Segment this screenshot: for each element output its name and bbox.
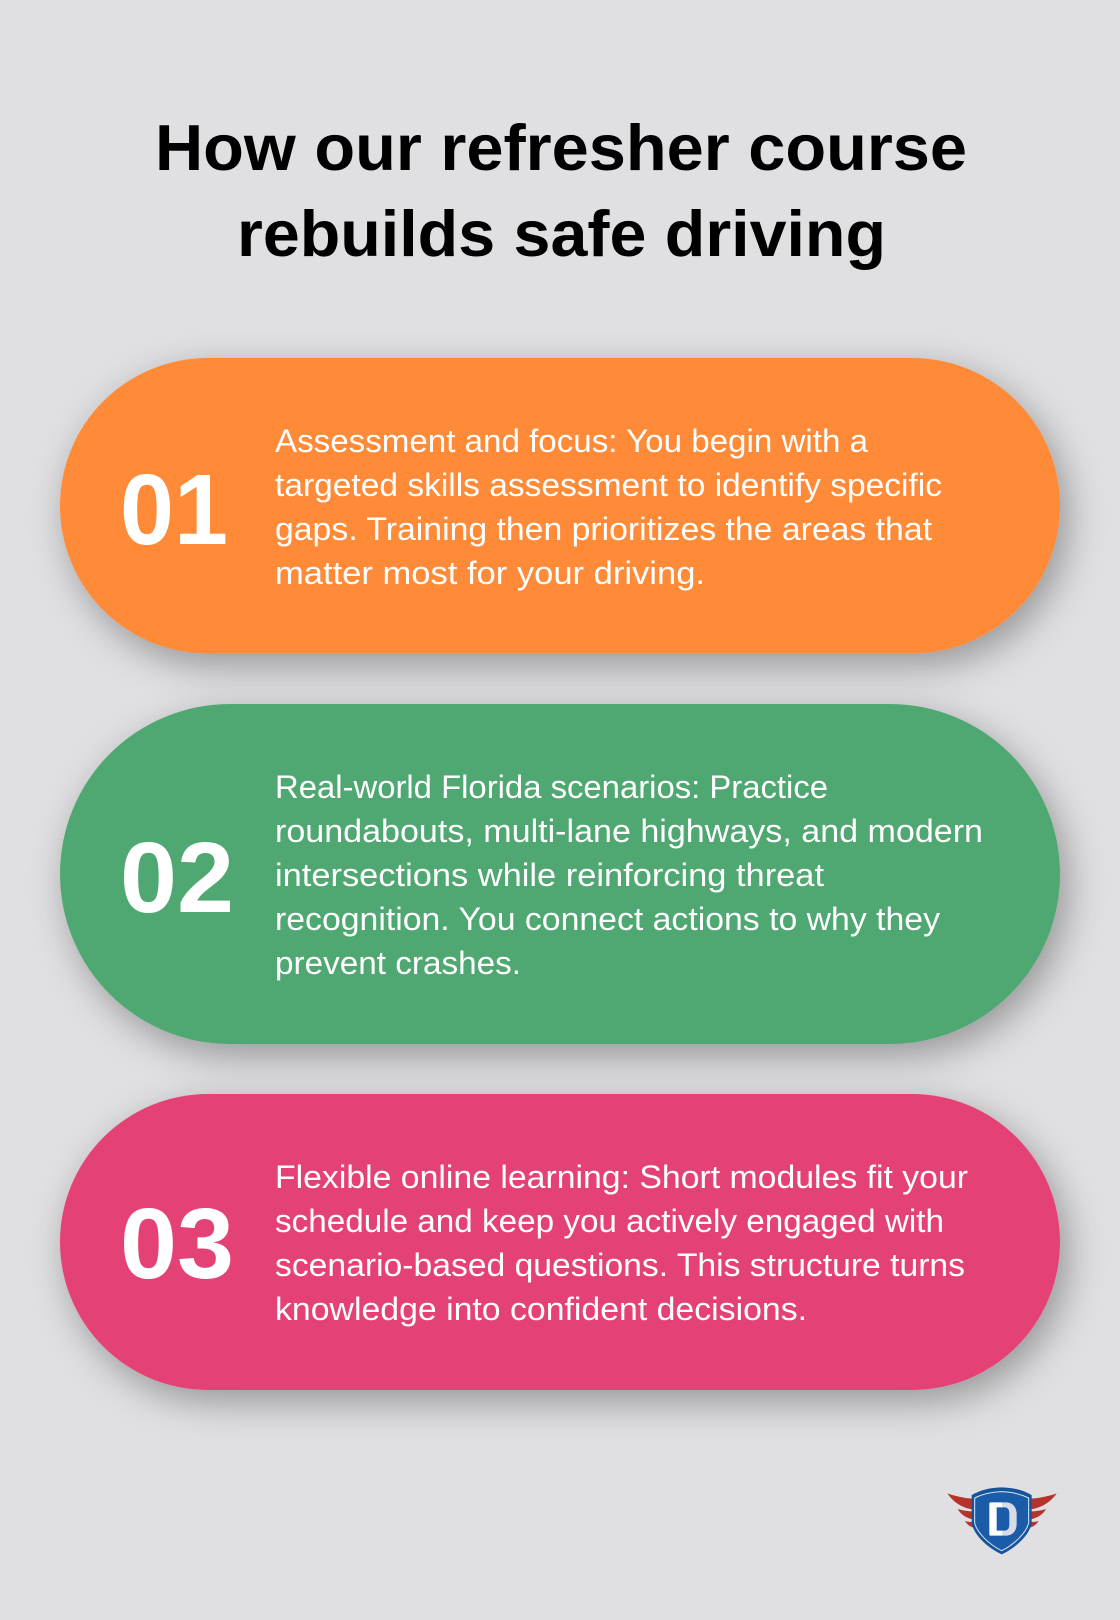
text: step 01 description: gaps. Training then prioritizes the areas that (275, 511, 932, 547)
number 02: 02 (120, 822, 234, 934)
text: step 03 description: Flexible online learning: Short modules fit your (275, 1159, 968, 1195)
text: step 02 description: Real-world Florida scenarios: Practice (275, 769, 828, 805)
panel: step 03 flexible online learning (60, 1094, 1060, 1390)
title: How our refresher course (155, 111, 967, 184)
icon: winged shield logo (947, 1487, 1057, 1554)
title (155, 111, 967, 270)
text: step 02 description (275, 769, 983, 981)
pink pill background (60, 1094, 1060, 1390)
panel: step 01 assessment and focus (60, 358, 1060, 654)
text: step 02 description: intersections while reinforcing threat (275, 857, 824, 893)
text: step 03 description: knowledge into confident decisions. (275, 1291, 807, 1327)
number 01: 01 (120, 454, 228, 566)
text: step 01 description: targeted skills assessment to identify specific (275, 467, 942, 503)
panel: step 02 real-world Florida scenarios (60, 704, 1060, 1044)
title: rebuilds safe driving (237, 197, 886, 270)
text: step 01 description: matter most for your driving. (275, 555, 705, 591)
text: step 02 description: recognition. You connect actions to why they (275, 901, 940, 937)
text: step 01 description: Assessment and focus: You begin with a (275, 423, 868, 459)
green pill background (60, 704, 1060, 1044)
number 03: 03 (120, 1188, 234, 1300)
text: step 02 description: prevent crashes. (275, 945, 521, 981)
text: step 02 description: roundabouts, multi-lane highways, and modern (275, 813, 983, 849)
text: step 03 description (275, 1159, 968, 1327)
text: step 03 description: scenario-based questions. This structure turns (275, 1247, 965, 1283)
text: step 01 description (275, 423, 942, 591)
text: step 03 description: schedule and keep you actively engaged with (275, 1203, 944, 1239)
orange pill background (60, 358, 1060, 654)
